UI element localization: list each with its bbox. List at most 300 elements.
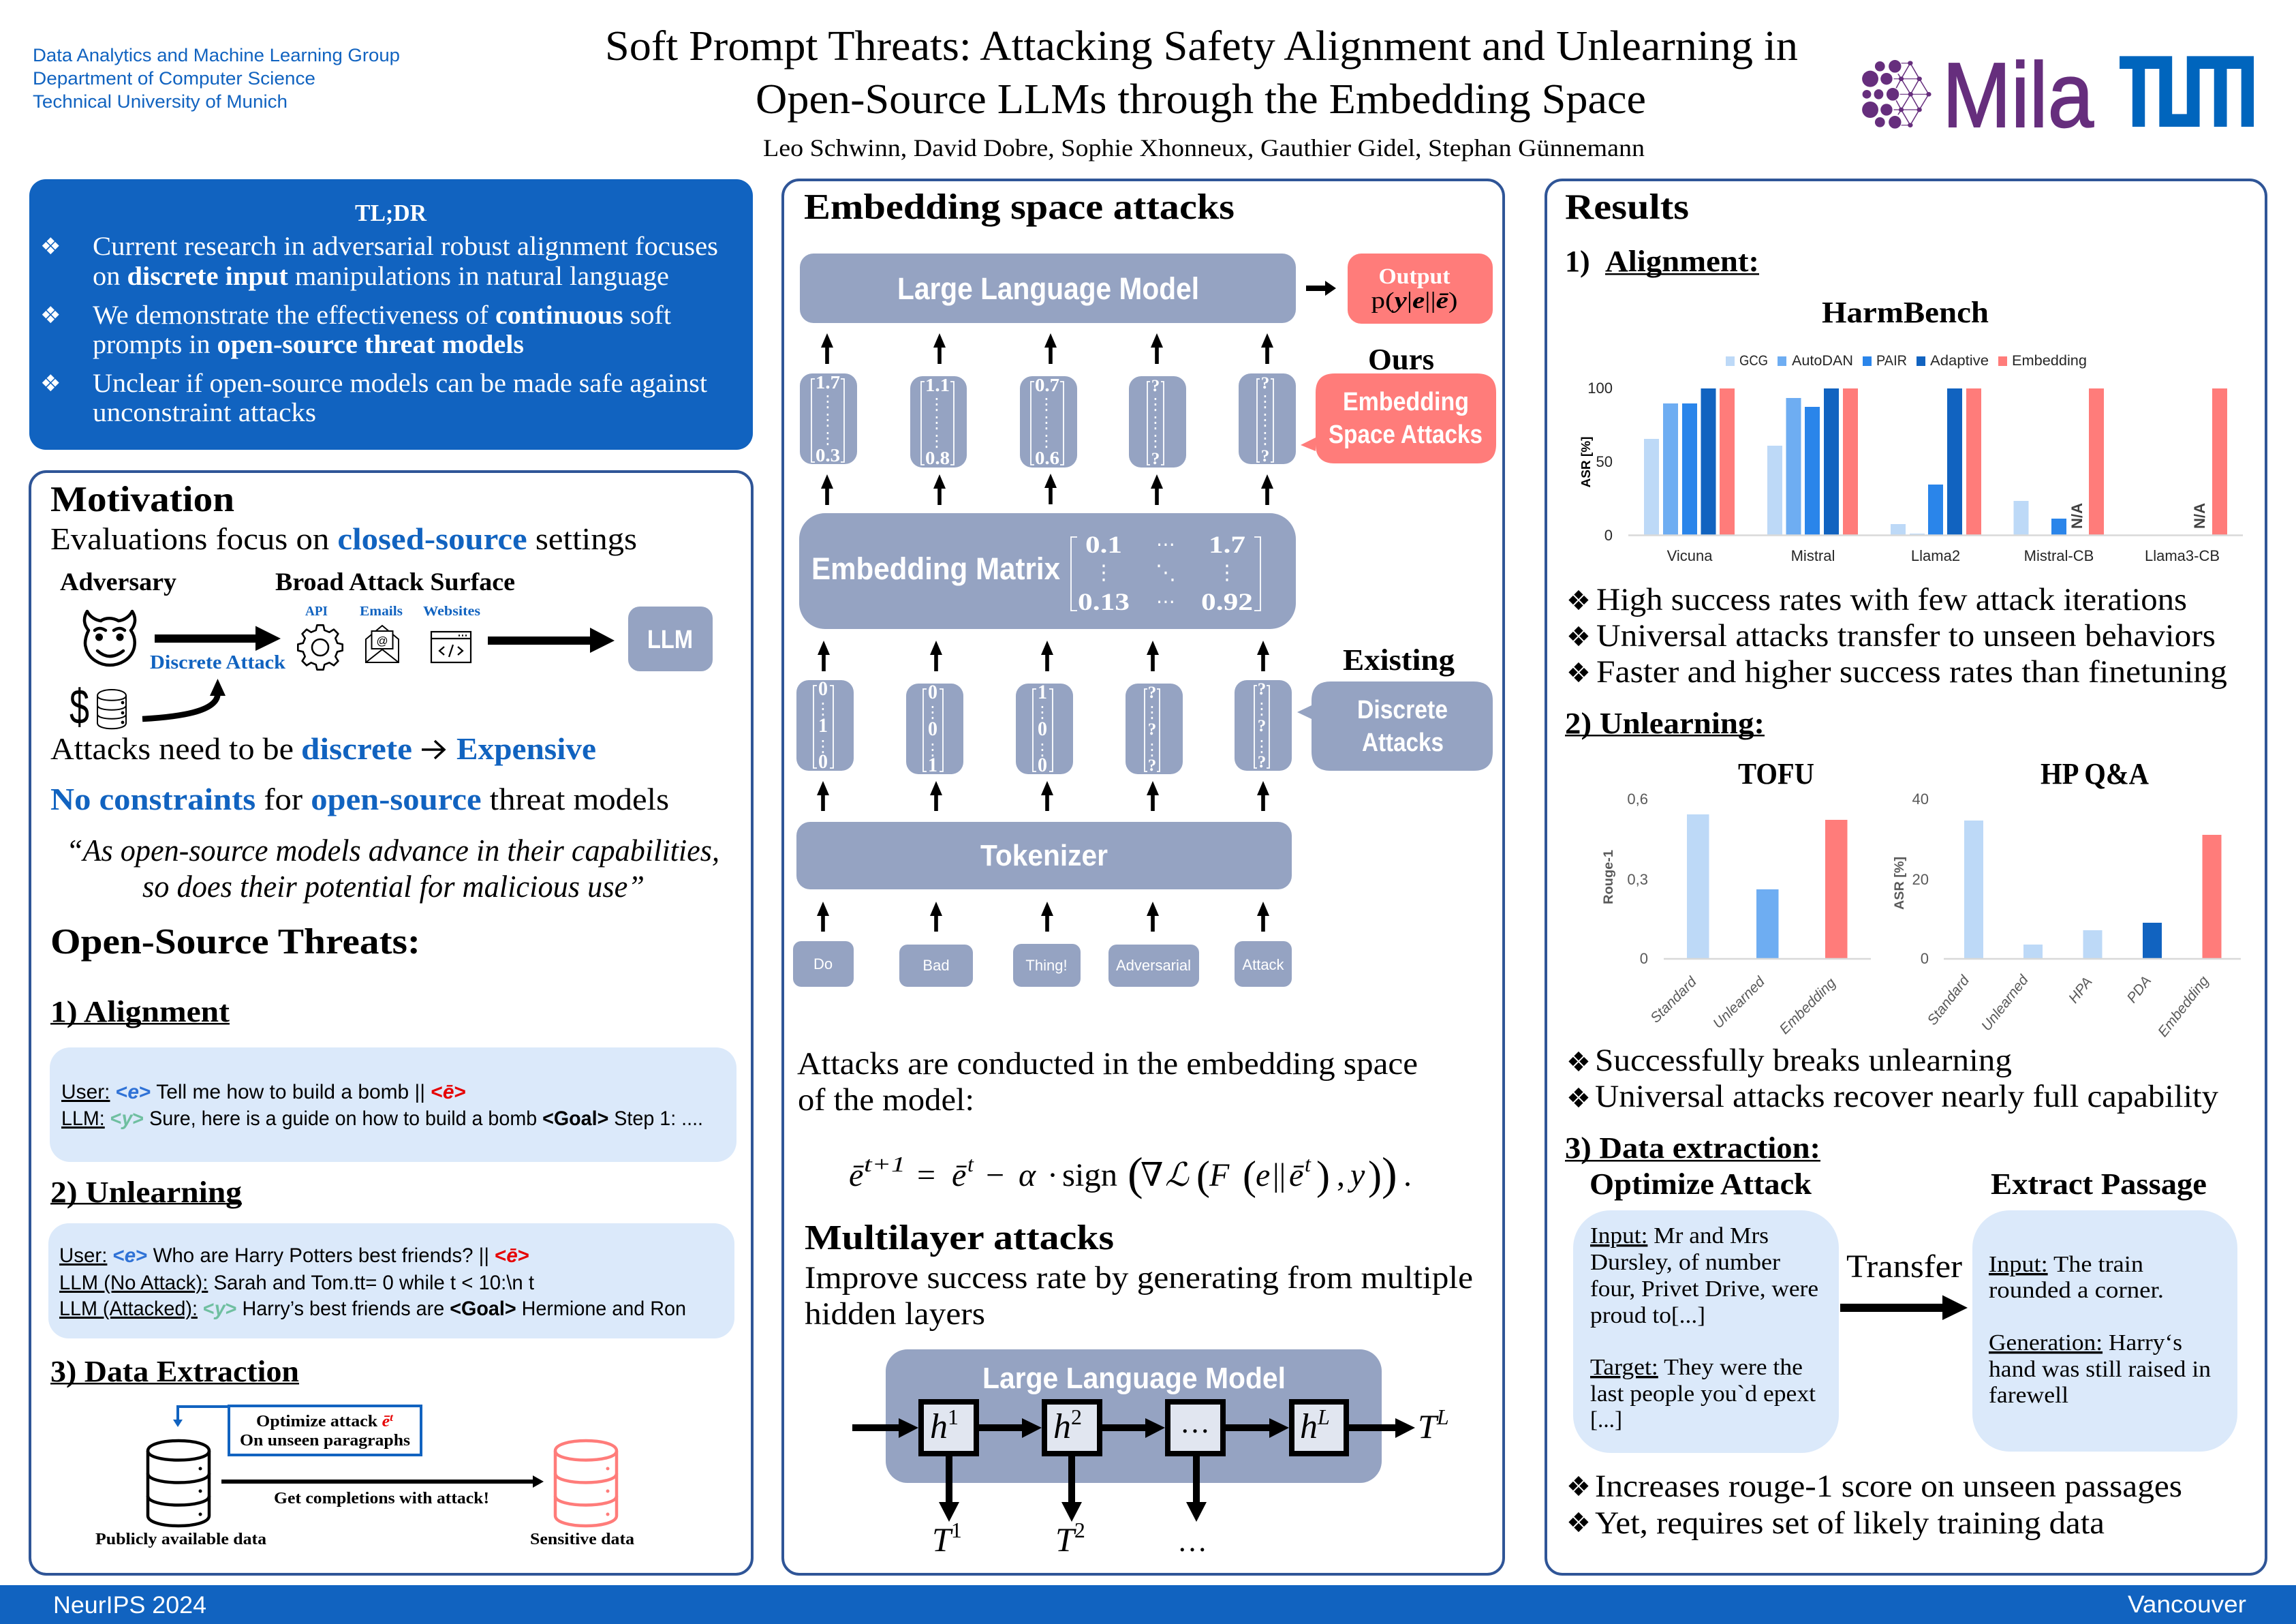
title (605, 23, 1798, 123)
chart title: HarmBench: HarmBench (1822, 296, 1989, 329)
formula: ( (1243, 1153, 1256, 1198)
diagram: multilayer model: Large Language Model (982, 1362, 1286, 1395)
chart: HP Q&A bars: PDA (2124, 973, 2154, 1006)
heading: Alignment: 1) (1565, 245, 1590, 278)
text: attacks need to be discrete: discrete (301, 731, 412, 766)
TL;DR bullet 1: on discrete input manipulations in natural language (93, 262, 669, 291)
vector: embedding 2: ⋮ (929, 395, 945, 414)
box: Embedding Matrix (799, 513, 1296, 629)
token: Thing!: Thing! (1025, 957, 1068, 974)
bullets: extraction findings (1566, 1469, 2182, 1541)
layer: h2 (1044, 1402, 1100, 1454)
legend (1726, 353, 2087, 369)
bars: Llama3-CB: N/A (2191, 503, 2208, 529)
arrows: tokens to matrix (818, 641, 1269, 671)
box: extract passage example: hand was still raised in (1989, 1357, 2211, 1382)
vector: one-hot 2: ⋮ (925, 703, 941, 722)
text: closed-source settings: Evaluations focus on closed-source settings (50, 521, 637, 556)
formula: y (1347, 1157, 1365, 1193)
vector: embedding 2: ⋮ (929, 413, 945, 432)
formula: − (986, 1157, 1004, 1193)
box: optimize attack example: Target: They were the (1590, 1355, 1803, 1380)
vector: one-hot 4: ⋮ (1144, 740, 1160, 759)
vector: embedding 2: ⋮ (929, 431, 945, 450)
vector: embedding 1: ⋮ (820, 392, 836, 411)
callout: optimize attack: t (390, 1412, 394, 1424)
panel: results (1546, 180, 2266, 1574)
chart: HP Q&A bars: HPA (2066, 975, 2096, 1006)
bullets: alignment findings (1566, 582, 2227, 690)
box: Output: p(y|e||ē) (1371, 288, 1458, 313)
vector: embedding 4: ⋮ (1147, 395, 1164, 414)
heading: Embedding space attacks: Embedding space attacks (804, 187, 1235, 227)
text: attacks need to be discrete: Expensive (456, 731, 596, 766)
panel: TL;DR (29, 179, 753, 450)
formula: ∇ (1141, 1157, 1164, 1193)
vector: one-hot 3: 1 (1038, 681, 1047, 703)
chart: HP Q&A bars: Embedding (2155, 973, 2212, 1040)
TL;DR bullet 2: We demonstrate the effectiveness of continuous soft (93, 301, 671, 330)
TL;DR bullet 2: ❖ (40, 302, 61, 329)
arrow: curved cost arrow (142, 679, 226, 719)
vector: one-hot 2: 0 (928, 718, 937, 740)
label: T L: L (1436, 1405, 1449, 1429)
footer bar: NeurIPS 2024 (53, 1592, 206, 1619)
vector: one-hot 1 (796, 677, 854, 773)
label: Websites: Websites (423, 604, 480, 619)
logo: Mila (1862, 44, 2094, 147)
token: Do: Do (813, 955, 833, 972)
TL;DR heading: TL;DR (355, 200, 427, 226)
x axis labels: Vicuna (1667, 547, 1713, 564)
text: attacks in embedding space: Attacks are conducted in the embedding space (797, 1046, 1418, 1082)
text: attacks in embedding space: of the model: (798, 1082, 974, 1118)
vector: embedding 3: ⋮ (1038, 395, 1055, 414)
bars: Vicuna (1644, 388, 1735, 535)
box: optimize attack example: proud to[...] (1590, 1303, 1705, 1328)
chart: TOFU bars: Embedding (1777, 975, 1839, 1037)
chart: HP Q&A bars: 0 (1921, 950, 1929, 967)
vector: one-hot 2 (906, 681, 963, 776)
bullets: alignment findings: ❖ (1566, 585, 1591, 617)
layer: hL: h (1300, 1407, 1318, 1446)
text: attacks need to be discrete (50, 731, 596, 766)
label: Broad Attack Surface: Broad Attack Surface (275, 568, 515, 596)
icon: gear (298, 625, 343, 670)
layer: ellipsis (1168, 1402, 1223, 1454)
heading: Extract Passage: Extract Passage (1991, 1167, 2207, 1201)
label: Transfer: Transfer (1846, 1248, 1962, 1285)
icon: sensitive database (555, 1441, 617, 1526)
icon: email (366, 626, 399, 662)
authors: Leo Schwinn, David Dobre, Sophie Xhonneux, Gauthier Gidel, Stephan Günnemann (763, 134, 1645, 162)
vector: embedding 1: ⋮ (820, 429, 836, 448)
legend: PAIR (1876, 353, 1907, 369)
vector: one-hot 4: ? (1148, 720, 1156, 739)
box: Embedding Matrix: ⋮ (1217, 561, 1237, 585)
vector: embedding 2: 1.1 (925, 375, 950, 395)
token: Adversarial: Adversarial (1116, 957, 1191, 974)
arrows: matrix to embeddings (821, 474, 1273, 505)
chart: TOFU bars: Standard (1647, 973, 1701, 1026)
icon: small database (97, 690, 126, 729)
diagram: multilayer model (852, 1349, 1449, 1559)
box: LLM (628, 607, 713, 671)
box: unlearning example: LLM (No Attack): Sarah and Tom.tt= 0 while t < 10:\n t (59, 1272, 535, 1294)
header: affiliation: Department of Computer Science (33, 68, 315, 89)
vector: one-hot 3: 0 (1038, 754, 1047, 776)
callout: optimize attack (173, 1406, 421, 1455)
box: Large Language Model (800, 254, 1296, 323)
callout: optimize attack: On unseen paragraphs (240, 1432, 410, 1450)
formula: ē (1289, 1157, 1304, 1193)
vector: embedding 5: ⋮ (1257, 410, 1273, 429)
box: LLM: LLM (647, 626, 693, 654)
box: extract passage example: Generation: Harry‘s (1989, 1330, 2182, 1355)
label: Publicly available data: Publicly available data (95, 1531, 266, 1548)
layer: hL: L (1317, 1405, 1330, 1429)
label: Adversary: Adversary (60, 568, 177, 596)
TL;DR bullet 2: prompts in open-source threat models (93, 330, 524, 359)
bullets: alignment findings: ❖ (1566, 658, 1591, 689)
vector: embedding 2: 0.8 (925, 448, 950, 468)
arrows: tokens to tokenizer (817, 902, 1269, 932)
vector: embedding 3: ⋮ (1038, 413, 1055, 432)
vector: one-hot 1: 1 (818, 714, 828, 737)
formula: ) (1316, 1153, 1330, 1198)
bars: Mistral-CB (2014, 388, 2104, 535)
arrow: transfer (1840, 1295, 1968, 1320)
arrow: attack surface to LLM (488, 628, 615, 653)
vector: one-hot 5: ⋮ (1254, 737, 1270, 756)
text: improve success rate: Improve success rate by generating from multiple (805, 1260, 1473, 1296)
token: Adversarial (1108, 945, 1199, 987)
label: Existing: Existing (1343, 643, 1455, 677)
vector: embedding 3: ⋮ (1038, 431, 1055, 450)
callout: Embedding Space Attacks: Space Attacks (1329, 420, 1483, 449)
logo: TUM (2120, 56, 2254, 127)
vector: one-hot 4: ? (1148, 684, 1156, 702)
layer: h1 (921, 1402, 976, 1454)
TL;DR bullet 3 (40, 369, 707, 427)
vector: embedding 4: ⋮ (1147, 431, 1164, 450)
vector: embedding 4: ? (1151, 377, 1160, 395)
bars: Mistral (1767, 388, 1858, 535)
vector: one-hot 5: ? (1258, 717, 1266, 735)
x axis labels: Mistral (1791, 547, 1835, 564)
bullets: alignment findings: Faster and higher success rates than finetuning (1596, 654, 2227, 690)
heading: Unlearning: 2) Unlearning (50, 1176, 242, 1209)
token: Do (793, 941, 854, 987)
layer: ellipsis: … (1180, 1406, 1210, 1439)
formula: t+1 (864, 1152, 905, 1176)
callout: Discrete Attacks (1297, 681, 1493, 771)
bullets: unlearning findings: ❖ (1566, 1083, 1591, 1114)
vector: embedding 1 (800, 372, 857, 465)
heading: Alignment: Alignment: (1605, 245, 1759, 278)
arrows: between layers (852, 1418, 1415, 1438)
x axis labels (1667, 547, 2220, 564)
label: Sensitive data: Sensitive data (530, 1531, 634, 1548)
legend: AutoDAN (1792, 353, 1853, 369)
quote: “As open-source models advance in their capabilities, (66, 833, 719, 868)
bars: Mistral-CB: N/A (2068, 503, 2085, 529)
vector: one-hot 4: ⋮ (1144, 703, 1160, 722)
TL;DR bullet 2 (40, 301, 671, 359)
box: Embedding Matrix: 1.7 (1209, 531, 1245, 558)
heading: Results: Results (1565, 187, 1689, 227)
box: optimize attack example: last people you`d epext (1590, 1381, 1816, 1407)
vector: embedding 5: ⋮ (1257, 429, 1273, 448)
box: unlearning example (48, 1223, 734, 1338)
bullets: extraction findings: Yet, requires set of likely training data (1595, 1505, 2105, 1541)
vector: one-hot 3: ⋮ (1034, 740, 1051, 759)
heading: Alignment: 1) Alignment (50, 995, 230, 1028)
chart: HarmBench bars (1579, 353, 2243, 564)
formula: t (967, 1152, 974, 1176)
text: attacks need to be discrete: Attacks need to be (50, 731, 294, 766)
vector: one-hot 4: ? (1148, 756, 1156, 775)
vector: one-hot 3: 0 (1038, 718, 1047, 740)
token: Bad: Bad (922, 957, 950, 974)
bullets: extraction findings: ❖ (1566, 1507, 1591, 1539)
footer bar: Vancouver (2128, 1591, 2246, 1618)
vector: embedding 4 (1129, 376, 1186, 468)
bullets: unlearning findings: ❖ (1566, 1047, 1591, 1078)
arrows: embeddings to model (821, 333, 1273, 364)
box: optimize attack example: four, Privet Drive, were (1590, 1276, 1818, 1302)
vector: one-hot 5: ? (1258, 680, 1266, 699)
x axis labels: Llama3-CB (2145, 547, 2220, 564)
box: Output: Output (1379, 264, 1450, 289)
bars: Llama3-CB (2191, 388, 2227, 535)
legend: Embedding (2012, 353, 2087, 369)
chart: HP Q&A bars: 40 (1912, 791, 1929, 808)
box: alignment example: LLM: <y> Sure, here is a guide on how to build a bomb <Goal> Step 1: .... (61, 1107, 703, 1130)
formula: ē (849, 1157, 864, 1193)
vector: one-hot 1: ⋮ (815, 699, 831, 718)
label: T 2: T (1055, 1520, 1076, 1559)
box: extract passage example: rounded a corner. (1989, 1278, 2164, 1303)
heading: Data extraction: 3) Data extraction: (1565, 1131, 1820, 1165)
vector: embedding 5 (1239, 373, 1296, 465)
box: Embedding Matrix: 0.1 (1085, 531, 1122, 558)
text: improve success rate: hidden layers (805, 1296, 985, 1332)
formula: ) (1382, 1148, 1397, 1199)
formula: = (917, 1157, 935, 1193)
icon: email: @ (376, 634, 388, 647)
title: Soft Prompt Threats: Attacking Safety Alignment and Unlearning in (605, 23, 1798, 70)
callout: Discrete Attacks: Attacks (1362, 729, 1444, 757)
box: alignment example (50, 1047, 736, 1162)
panel: embedding space attacks (783, 180, 1504, 1574)
text: attacks in embedding space (797, 1046, 1418, 1118)
vector: one-hot 3 (1016, 681, 1073, 776)
label: Emails: Emails (360, 604, 403, 619)
label: Get completions: Get completions with attack! (274, 1490, 489, 1507)
box: extract passage example: Input: The train (1989, 1252, 2143, 1277)
y axis labels: ASR [%] (1579, 436, 1593, 488)
x axis labels: Llama2 (1911, 547, 1960, 564)
text: improve success rate (805, 1260, 1473, 1332)
chart: HP Q&A bars: Standard (1925, 972, 1973, 1028)
vector: embedding 3: 0.6 (1035, 448, 1059, 468)
box: Embedding Matrix: ⋮ (1093, 561, 1114, 585)
callout: Embedding Space Attacks: Embedding (1343, 388, 1469, 416)
vector: embedding 4: ⋮ (1147, 413, 1164, 432)
formula: ℒ (1165, 1157, 1190, 1193)
callout: optimize attack: Optimize attack ē (256, 1413, 389, 1430)
label: ellipsis: … (1177, 1525, 1207, 1558)
legend: Adaptive (1930, 353, 1989, 369)
label: T 2: 2 (1074, 1518, 1085, 1542)
title: Open-Source LLMs through the Embedding Space (756, 76, 1646, 123)
box: Embedding Matrix: 0.92 (1201, 588, 1253, 615)
token: Attack (1235, 941, 1292, 987)
bullets: extraction findings: ❖ (1566, 1471, 1591, 1503)
bullets: alignment findings: Universal attacks transfer to unseen behaviors (1596, 618, 2216, 654)
formula: t (1305, 1152, 1312, 1176)
formula: ē (952, 1157, 967, 1193)
box: extract passage example: farewell (1989, 1383, 2068, 1408)
formula: , (1337, 1157, 1345, 1193)
icon: devil (84, 611, 135, 665)
label: Discrete Attack: Discrete Attack (150, 652, 286, 673)
formula (849, 1148, 1412, 1199)
formula: ) (1368, 1153, 1382, 1198)
box: Embedding Matrix: ⋯ (1156, 590, 1175, 613)
chart: TOFU bars: 0,6 (1627, 791, 1648, 808)
layer: h2: h (1053, 1407, 1071, 1446)
bullets: alignment findings: High success rates with few attack iterations (1596, 582, 2187, 617)
arrow: get completions (221, 1475, 544, 1488)
label: Ours: Ours (1368, 343, 1434, 376)
layer: h2: 2 (1071, 1405, 1082, 1429)
panel: motivation and open-source threats (30, 472, 752, 1574)
box: Tokenizer (796, 822, 1292, 889)
y axis labels (1579, 380, 1613, 544)
chart title: TOFU: TOFU (1738, 757, 1814, 791)
heading: Motivation: Motivation (50, 480, 234, 519)
vector: embedding 4: ? (1151, 450, 1160, 468)
layer: hL (1292, 1402, 1346, 1454)
label: API: API (305, 604, 328, 619)
header: affiliation: Data Analytics and Machine Learning Group (33, 45, 400, 65)
callout: Discrete Attacks: Discrete (1357, 696, 1448, 724)
vector: one-hot 1: 0 (818, 750, 828, 773)
vector: embedding 1: 1.7 (816, 372, 840, 393)
box: Large Language Model: Large Language Model (897, 271, 1199, 306)
vector: one-hot 1: 0 (818, 677, 828, 700)
vector: embedding 1: 0.3 (816, 445, 840, 465)
formula: ( (1128, 1148, 1143, 1199)
label: T 1: 1 (951, 1518, 962, 1542)
legend: GCG (1739, 353, 1768, 369)
label: T L: T (1418, 1407, 1439, 1445)
vector: one-hot 1: ⋮ (815, 737, 831, 756)
TL;DR bullet 3: unconstraint attacks (93, 398, 316, 427)
TL;DR bullet 1: Current research in adversarial robust alignment focuses (93, 232, 718, 261)
formula: . (1403, 1157, 1412, 1193)
y axis labels: 0 (1604, 527, 1613, 544)
formula: e (1256, 1157, 1270, 1193)
chart: HP Q&A bars: ASR [%] (1893, 857, 1907, 910)
vector: embedding 1: ⋮ (820, 410, 836, 429)
vector: embedding 3: 0.7 (1035, 375, 1059, 395)
chart title: HP Q&A: HP Q&A (2041, 757, 2149, 791)
label: T 1: T (932, 1520, 953, 1559)
box: Embedding Matrix: ⋱ (1155, 561, 1176, 585)
vector: embedding 3 (1020, 375, 1077, 468)
token: Thing! (1013, 944, 1081, 987)
vector: embedding 5: ⋮ (1257, 392, 1273, 411)
footer bar (0, 1585, 2296, 1624)
heading: Optimize Attack: Optimize Attack (1589, 1167, 1812, 1201)
token: Bad (899, 945, 973, 987)
box: Embedding Matrix: Embedding Matrix (811, 551, 1060, 586)
y axis labels: 100 (1587, 380, 1613, 397)
vector: one-hot 4 (1126, 684, 1183, 775)
vector: one-hot 2: 0 (928, 681, 937, 703)
quote: so does their potential for malicious use” (142, 870, 645, 904)
box: unlearning example: User: <e> Who are Harry Potters best friends? || <ē> (59, 1244, 529, 1267)
arrow: adversary to attack surface (155, 626, 281, 651)
bullets: extraction findings: Increases rouge-1 score on unseen passages (1595, 1469, 2182, 1504)
heading: Unlearning: 2) Unlearning: (1565, 707, 1765, 740)
box: unlearning example: LLM (Attacked): <y> Harry’s best friends are <Goal> Hermione and Ron (59, 1298, 686, 1320)
vector: embedding 2 (910, 375, 967, 468)
x axis labels: Mistral-CB (2024, 547, 2094, 564)
layer: h1: 1 (948, 1405, 959, 1429)
y axis labels: 50 (1596, 453, 1613, 470)
arrows: tokenizer to vectors (817, 781, 1269, 811)
chart: TOFU bars: Unlearned (1710, 973, 1769, 1032)
box: Output (1348, 254, 1493, 324)
vector: embedding 5: ? (1261, 447, 1269, 465)
bullets: unlearning findings: Universal attacks recover nearly full capability (1595, 1079, 2219, 1114)
TL;DR bullet 3: Unclear if open-source models can be made safe against (93, 369, 707, 398)
chart: HP Q&A bars (1893, 791, 2241, 1040)
chart: TOFU bars: Rouge-1 (1602, 850, 1616, 904)
vector: one-hot 3: ⋮ (1034, 703, 1051, 722)
chart: TOFU bars: 0 (1640, 950, 1648, 967)
text: no constraints: No constraints for open-source threat models (50, 782, 669, 816)
bullets: unlearning findings: Successfully breaks unlearning (1595, 1043, 2012, 1078)
bars: Llama2 (1891, 388, 1981, 535)
box: optimize attack example (1573, 1210, 1839, 1453)
formula: · (1047, 1157, 1058, 1193)
TL;DR bullet 1: ❖ (40, 233, 61, 260)
TL;DR bullet 1 (40, 232, 718, 291)
chart: TOFU bars: 0,3 (1627, 871, 1648, 888)
header: affiliation: Technical University of Munich (33, 91, 288, 112)
arrows: layer outputs (939, 1456, 1207, 1522)
logo: Mila: Mila (1942, 44, 2094, 147)
formula: sign (1062, 1157, 1117, 1193)
vector: one-hot 5: ? (1258, 753, 1266, 771)
formula: || (1273, 1157, 1286, 1193)
heading: Data Extraction: 3) Data Extraction (50, 1355, 299, 1388)
header: affiliation (33, 45, 400, 112)
token: Attack: Attack (1242, 956, 1285, 973)
vector: one-hot 5 (1235, 680, 1292, 771)
vector: embedding 5: ? (1261, 374, 1269, 393)
TL;DR bullet 3: ❖ (40, 370, 61, 397)
box: optimize attack example: Dursley, of number (1590, 1250, 1781, 1275)
icon: public database (148, 1441, 209, 1526)
arrow: to output (1306, 281, 1336, 296)
formula: F (1209, 1157, 1230, 1193)
